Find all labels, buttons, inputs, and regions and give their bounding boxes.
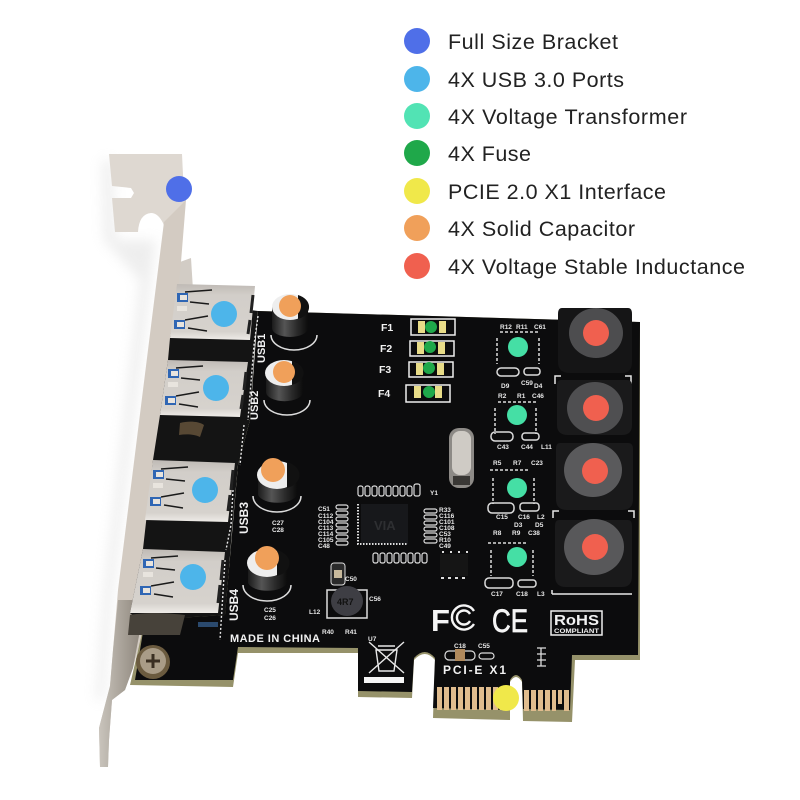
bracket tail shading — [99, 600, 142, 767]
fuse labels: F4 — [378, 388, 390, 400]
legend — [404, 28, 745, 279]
silk component labels: L12 — [309, 609, 321, 616]
USB port 4 — [130, 549, 225, 613]
silk component labels: Y1 — [430, 490, 438, 497]
RoHS logo: RoHS — [554, 612, 599, 629]
silk component labels: R33 — [439, 507, 451, 514]
fuse labels: F3 — [379, 364, 391, 376]
small component rows — [336, 484, 437, 563]
inductors — [552, 308, 634, 594]
small inductor L12 — [327, 586, 367, 618]
legend: voltage stable inductance: 4X Voltage Stable Inductance — [448, 255, 745, 279]
PCI-E label — [443, 643, 546, 677]
legend: PCIE interface: PCIE 2.0 X1 Interface — [448, 180, 666, 204]
PCI-E label: C18 — [454, 643, 466, 650]
silk component labels: C112 — [318, 513, 334, 520]
silk component labels: R11 — [516, 324, 528, 331]
silk component labels: C48 — [318, 543, 330, 550]
made in china label: MADE IN CHINA — [230, 633, 320, 645]
silk component labels: R1 — [517, 393, 526, 400]
USB port 1 — [170, 284, 255, 340]
silk component labels: C116 — [439, 513, 455, 520]
inductor 4 — [555, 519, 632, 587]
silk component labels: C108 — [439, 525, 455, 532]
fuse labels: F2 — [380, 343, 392, 355]
silk component labels: R8 — [493, 530, 502, 537]
silk component labels: C27 — [272, 520, 284, 527]
silk component labels: R7 — [513, 460, 522, 467]
silk dashed outlines by ports — [220, 316, 258, 640]
silk component labels — [264, 324, 552, 643]
PCI-E label: PCI-E X1 — [443, 663, 506, 677]
silk component labels: C105 — [318, 537, 334, 544]
silk component labels: R10 — [439, 537, 451, 544]
legend: full size bracket: Full Size Bracket — [448, 30, 618, 54]
legend: fuse — [404, 140, 531, 166]
silk component labels: R40 — [322, 629, 334, 636]
silk component labels: C43 — [497, 444, 509, 451]
dots: capacitors — [255, 295, 301, 570]
fuse 2 — [410, 341, 454, 356]
silk component labels: C38 — [528, 530, 540, 537]
silk component labels: C104 — [318, 519, 334, 526]
USB silk labels: USB1 — [256, 334, 268, 363]
silk component labels: C114 — [318, 531, 334, 538]
full size bracket — [99, 154, 193, 767]
silk component labels: R41 — [345, 629, 357, 636]
silk component labels: R2 — [498, 393, 507, 400]
silk component labels: C46 — [532, 393, 544, 400]
silk component labels: R9 — [512, 530, 521, 537]
PCB board — [130, 311, 640, 722]
capacitors — [243, 294, 317, 601]
silk component labels: C15 — [496, 514, 508, 521]
inductor 3 — [556, 443, 633, 510]
RoHS logo: COMPLIANT — [554, 628, 599, 635]
silk component labels: C49 — [439, 543, 451, 550]
silk component labels: D9 — [501, 383, 510, 390]
FCC logo: F — [431, 603, 450, 638]
fuse 3 — [409, 362, 453, 377]
silk component labels: C25 — [264, 607, 276, 614]
gold contacts — [437, 687, 569, 711]
dot: PCIE interface — [493, 685, 519, 711]
silk component labels: C113 — [318, 525, 334, 532]
main chip — [358, 504, 408, 544]
CE logo: CE — [492, 603, 528, 639]
USB silk labels: USB2 — [249, 391, 261, 420]
capacitor 2 — [264, 360, 310, 415]
main chip: VIA — [374, 518, 396, 533]
silk component labels: C44 — [521, 444, 533, 451]
crystal oscillator — [449, 428, 474, 488]
silk component labels: R5 — [493, 460, 502, 467]
silk component labels: C56 — [369, 596, 381, 603]
voltage transformer pads — [485, 332, 540, 588]
silk component labels: C101 — [439, 519, 455, 526]
inductor silk corners — [552, 376, 634, 594]
metal bits under ports — [179, 422, 204, 437]
screw — [136, 645, 170, 679]
dots: inductors — [582, 320, 609, 560]
capacitor 4 — [243, 549, 291, 601]
fuse 1 — [411, 319, 455, 335]
fuse 4 — [406, 385, 450, 402]
USB silk labels: USB3 — [237, 502, 251, 534]
legend: USB ports: 4X USB 3.0 Ports — [448, 68, 624, 92]
bracket shadow — [96, 160, 156, 700]
silk component labels: C59 — [521, 380, 533, 387]
silk component labels: C53 — [439, 531, 451, 538]
bracket strip and tail — [99, 200, 186, 767]
silk component labels: R12 — [500, 324, 512, 331]
dots: USB ports — [180, 301, 237, 590]
silk component labels: C16 — [518, 514, 530, 521]
dark area behind ports — [130, 300, 258, 625]
small inductor L12: 4R7 — [337, 597, 354, 607]
USB silk labels: USB4 — [227, 589, 241, 621]
annotation dots — [166, 176, 609, 711]
small IC — [440, 552, 468, 578]
silk component labels: C51 — [318, 506, 330, 513]
silk component labels: C61 — [534, 324, 546, 331]
inductor 2 — [557, 380, 632, 435]
USB silk labels — [227, 334, 268, 621]
FCC logo — [431, 603, 474, 638]
silk component labels: C26 — [264, 615, 276, 622]
rear tab — [178, 258, 193, 290]
capacitor 1 — [271, 294, 317, 350]
fuse labels: F1 — [381, 322, 393, 334]
silk component labels: U7 — [368, 636, 377, 643]
legend: voltage transformer: 4X Voltage Transformer — [448, 105, 687, 129]
fuses — [378, 319, 455, 402]
dot: bracket — [166, 176, 192, 202]
silk component labels: C28 — [272, 527, 284, 534]
RoHS logo — [551, 611, 602, 635]
silk component labels: L2 — [537, 514, 545, 521]
USB ports — [128, 284, 255, 635]
bracket top tab — [109, 154, 186, 240]
silk component labels: C17 — [491, 591, 503, 598]
dots: voltage transformers — [507, 337, 528, 567]
inductor 1 — [558, 308, 632, 373]
silk component labels: C23 — [531, 460, 543, 467]
silk component labels: C18 — [516, 591, 528, 598]
PCI-E label: C55 — [478, 643, 490, 650]
silk component labels: D3 — [514, 522, 523, 529]
USB port 3 — [145, 460, 235, 522]
recycling bin icon — [364, 642, 404, 683]
legend: fuse: 4X Fuse — [448, 142, 531, 166]
fuse labels — [378, 322, 393, 400]
legend: solid capacitor: 4X Solid Capacitor — [448, 217, 635, 241]
silk component labels: C50 — [345, 576, 357, 583]
dots: fuses — [423, 321, 437, 398]
silk component labels: D5 — [535, 522, 544, 529]
silk component labels: L3 — [537, 591, 545, 598]
small capacitor C58 — [331, 563, 345, 585]
silk component labels: L11 — [541, 444, 552, 451]
USB port 2 — [160, 360, 248, 417]
silk component labels: D4 — [534, 383, 543, 390]
capacitor 3 — [253, 461, 301, 512]
